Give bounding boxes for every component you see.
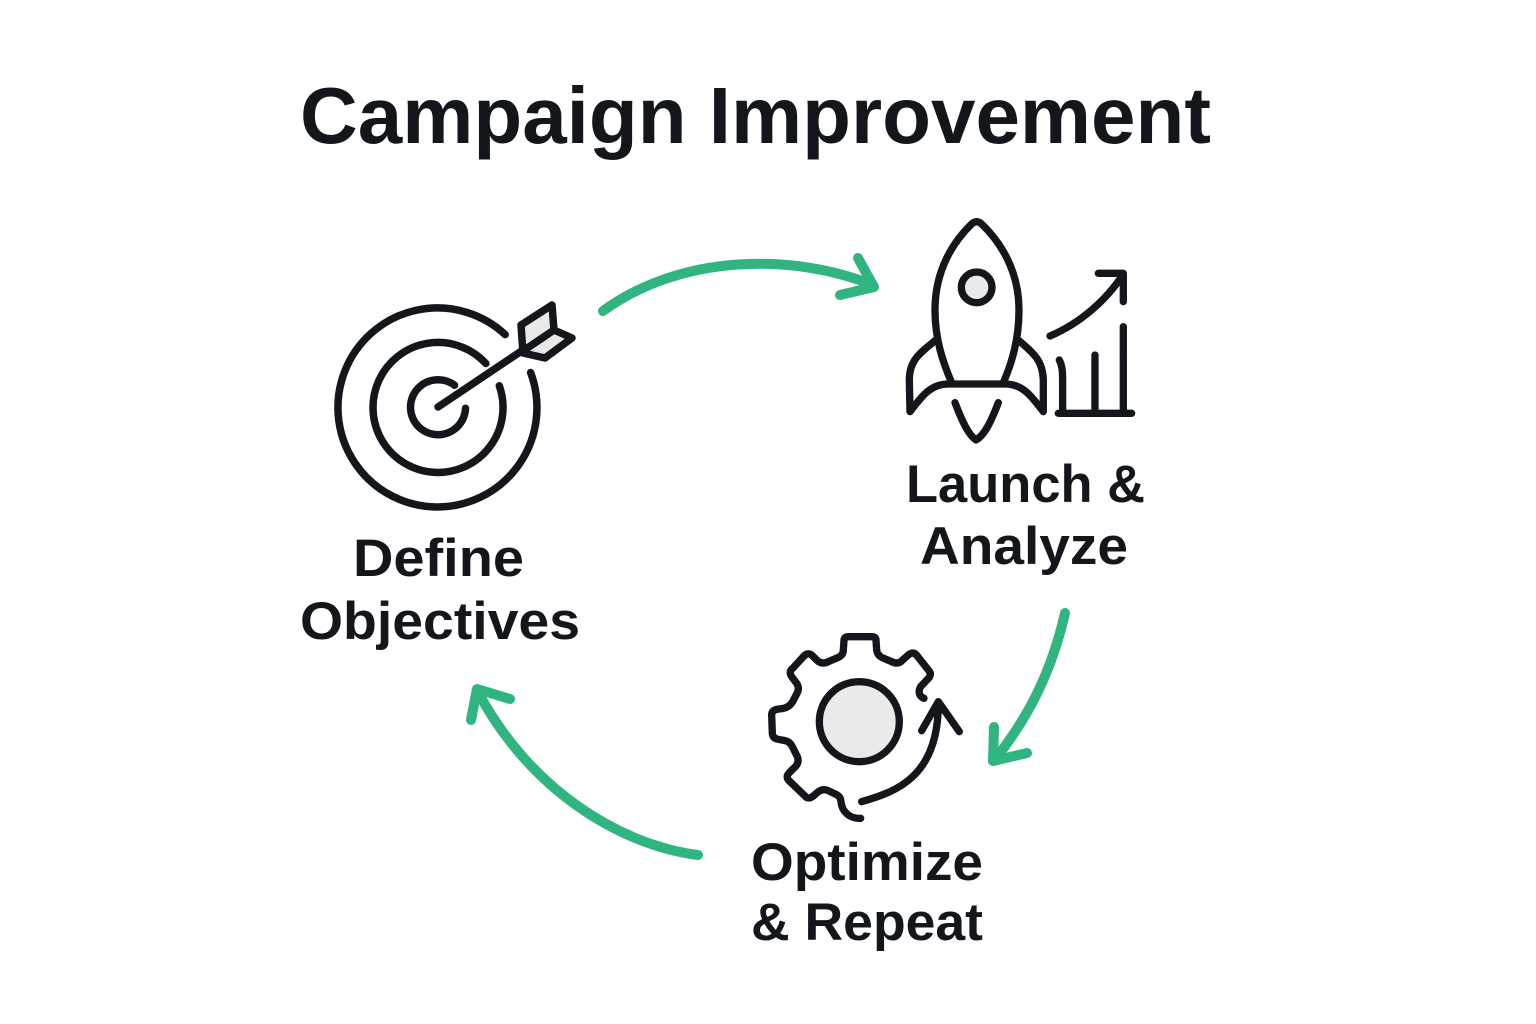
icon: target with arrow	[338, 305, 572, 507]
arrow: optimize to define	[471, 689, 698, 855]
rocket fins and base	[909, 341, 1043, 412]
rocket window	[961, 272, 992, 303]
label: launch and analyze	[906, 455, 1145, 576]
dart fletching	[521, 305, 572, 358]
growth arrow	[1050, 273, 1123, 336]
gear hub	[819, 682, 899, 762]
inner ring	[411, 380, 466, 435]
label: optimize and repeat	[751, 833, 983, 952]
label: define objectives	[300, 529, 580, 651]
label: optimize and repeat: & Repeat	[751, 893, 983, 952]
outer ring	[338, 308, 537, 507]
label: optimize and repeat: Optimize	[751, 833, 983, 892]
label: define objectives: Objectives	[300, 592, 580, 651]
gear outline	[772, 637, 930, 818]
cycle arrow	[862, 702, 959, 802]
label: define objectives: Define	[353, 529, 524, 588]
dart vane divider	[523, 330, 554, 351]
rocket flame	[955, 403, 998, 440]
arrow: define to launch	[603, 258, 874, 311]
icon: gear with cycle arrow	[772, 637, 959, 818]
title: Campaign Improvement	[300, 71, 1211, 160]
icon: rocket with growth chart	[909, 222, 1132, 440]
middle ring	[373, 342, 503, 472]
label: launch and analyze: Analyze	[920, 517, 1128, 576]
arrow: launch to optimize	[993, 613, 1065, 761]
chart bars	[1058, 327, 1132, 413]
dart shaft	[438, 350, 523, 407]
label: launch and analyze: Launch &	[906, 455, 1145, 514]
rocket body	[935, 222, 1019, 383]
